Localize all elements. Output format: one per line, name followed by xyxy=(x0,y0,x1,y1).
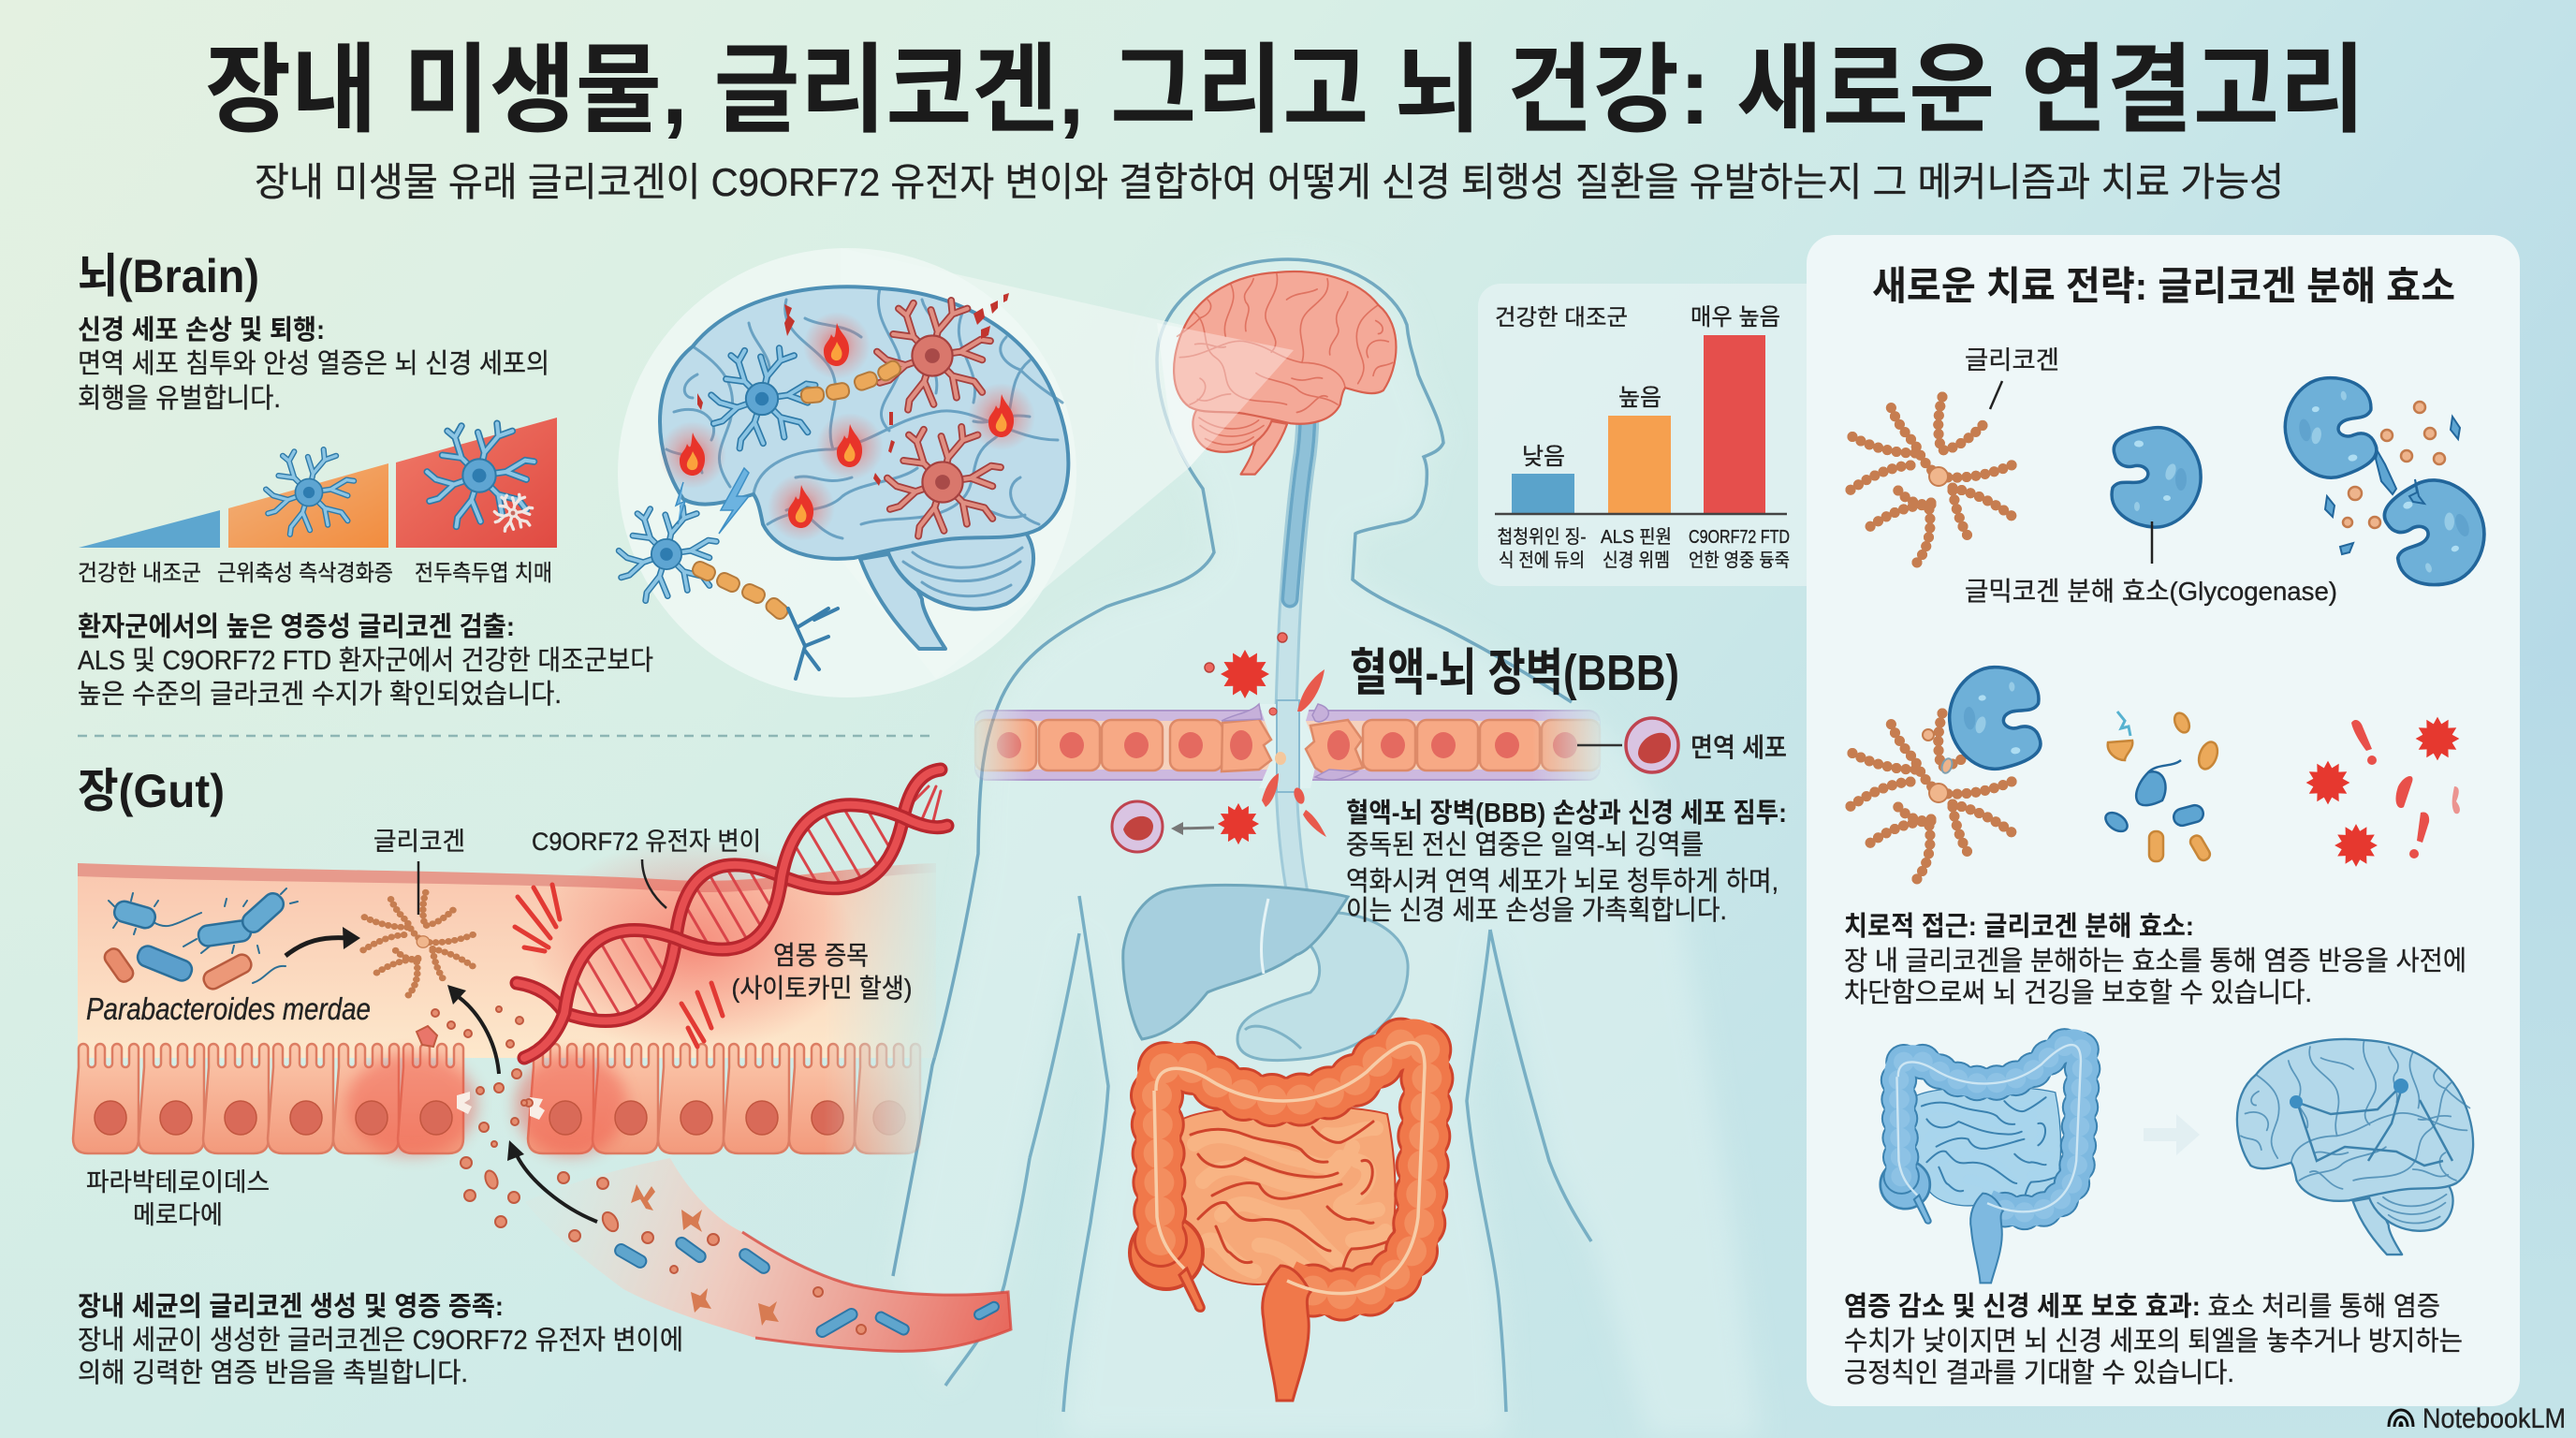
text block: gut glycogen production xyxy=(78,1291,683,1388)
text block: BBB damage: 혈액-뇌 장벽(BBB) 손상과 신경 세포 짐투: xyxy=(1346,798,1787,829)
icon: damaged neuron xyxy=(494,494,533,531)
blood-brain barrier band xyxy=(975,700,1600,792)
text block: gut glycogen production: 장내 세균의 글리코겐 생성 및 영증 증족: xyxy=(78,1291,504,1322)
section heading: brain: 뇌(Brain) xyxy=(78,250,259,302)
chart axis labels: 첩청위인 징- xyxy=(1498,526,1586,548)
inflammation flames xyxy=(659,312,1035,541)
brain beam overlay xyxy=(1157,323,1294,468)
liver and stomach xyxy=(1123,885,1408,1061)
spotlight beam and circle xyxy=(618,248,1294,697)
icon: recovering brain xyxy=(2237,1039,2473,1255)
lumen tissue xyxy=(78,863,936,1058)
stage wedge chart xyxy=(78,418,557,586)
lower cytokine xyxy=(1218,803,1259,844)
text block: BBB heading: 혈액-뇌 장벽(BBB) xyxy=(1350,645,1679,701)
text block: BBB damage: 이는 신경 세포 손성을 가촉획합니다. xyxy=(1346,895,1727,926)
panel: bar chart xyxy=(1478,284,1834,586)
arrow: vessel to breach xyxy=(507,1140,597,1222)
label: glycogen: 글리코겐 xyxy=(1965,346,2059,374)
upper cytokine xyxy=(1221,650,1269,698)
stomach xyxy=(1237,912,1408,1061)
icon: gut glycogen xyxy=(360,892,476,996)
digested fragments xyxy=(2102,711,2221,862)
gut labels xyxy=(373,828,761,915)
icon: immune cell xyxy=(1626,718,1678,772)
text block: neuron damage: 신경 세포 손상 및 퇴행: xyxy=(78,315,325,345)
lower-left neuron with axon xyxy=(619,506,838,679)
text block: therapeutic approach: 장 내 글리코겐을 분해하는 효소를 통해 염증 반응을 사전에 xyxy=(1844,946,2466,976)
leaking glycogen particles xyxy=(417,1006,533,1147)
arrow: bacteria to glycogen xyxy=(285,927,360,956)
text block: therapeutic approach xyxy=(1844,911,2466,1008)
intestines xyxy=(1130,1040,1427,1401)
text block: protective effect xyxy=(1844,1291,2463,1388)
large inflamed brain xyxy=(619,286,1068,679)
label: Parabacteroides merdae: Parabacteroides merdae xyxy=(86,991,371,1026)
chart axis labels: C9ORF72 FTD xyxy=(1689,527,1790,548)
torn membrane flaps xyxy=(1222,704,1357,780)
text block: patient glycogen xyxy=(78,611,653,710)
inflammation redness xyxy=(346,1053,627,1156)
wedge: ALS xyxy=(228,463,388,548)
label: Korean species name: 메로다에 xyxy=(133,1201,223,1229)
label: Korean species name xyxy=(86,1168,270,1229)
icon: enzyme xyxy=(2112,428,2201,527)
arrow: faint recovery xyxy=(2144,1114,2200,1155)
broken endothelial cells xyxy=(1222,719,1271,771)
damaged red neuron lower xyxy=(887,427,1001,536)
label: inflammation amplification xyxy=(732,941,912,1003)
chart value labels: 건강한 대조군 xyxy=(1495,305,1628,330)
enzymes digesting glycogen xyxy=(2277,371,2499,597)
text block: neuron damage: 회행을 유벌합니다. xyxy=(78,383,281,414)
text block: therapeutic approach: 치로적 접근: 글리코겐 분해 효소: xyxy=(1844,911,2194,942)
text block: patient glycogen: ALS 및 C9ORF72 FTD 환자군에서 건강한 대조군보다 xyxy=(78,645,653,676)
chart value labels: 높음 xyxy=(1618,385,1661,411)
bacteria in bloodstream xyxy=(613,1236,1001,1339)
icon: enzyme approaching glycogen xyxy=(1847,664,2044,880)
chart value labels xyxy=(1495,304,1780,470)
chart axis labels: 신경 위멤 xyxy=(1603,550,1670,571)
human body silhouette xyxy=(893,259,1760,1438)
icon: glycogen xyxy=(1847,397,2015,564)
arrow: glycogen leak upward xyxy=(447,985,499,1074)
DNA helix xyxy=(515,770,947,1058)
inflammatory particles around BBB xyxy=(1112,633,1326,852)
tissue damage marks xyxy=(697,293,1009,486)
liver xyxy=(1123,885,1348,1039)
text block: gut glycogen production: 장내 세균이 생성한 글러코겐은 C9ORF72 유전자 변이에 xyxy=(78,1326,683,1356)
text block: BBB damage xyxy=(1346,798,1787,926)
chart axis labels xyxy=(1498,526,1790,571)
epithelial breach tears xyxy=(457,1092,545,1120)
chart axis labels: ALS 핀원 xyxy=(1601,526,1672,548)
icon: immune cell lower xyxy=(1112,801,1163,852)
section heading: gut: 장(Gut) xyxy=(78,765,225,817)
wedge: healthy xyxy=(79,510,220,548)
text block: neuron damage: 면역 세포 침투와 안성 열증은 뇌 신경 세포의 xyxy=(78,348,549,379)
lightning signal xyxy=(676,468,749,534)
spinal cord tube xyxy=(1286,352,1308,932)
chart axis labels: 언한 영중 듕죽 xyxy=(1689,550,1790,571)
stage labels: 근위축성 측삭경화증 xyxy=(217,561,393,586)
inflammation burst marks xyxy=(515,885,723,1047)
arrow: cytokine to immune cell xyxy=(1171,822,1214,835)
glycogen particles in vessel xyxy=(461,1157,866,1334)
text block: BBB damage: 역화시켜 연역 세포가 뇌로 청투하게 하며, xyxy=(1346,866,1778,897)
panel: therapy strategy xyxy=(1807,235,2520,1406)
gut inflammation glow xyxy=(529,838,856,1053)
subtitle: 장내 미생물 유래 글리코겐이 C9ORF72 유전자 변이와 결합하여 어떻게 신경 퇴행성 질환을 유발하는지 그 메커니즘과 치료 가능성 xyxy=(255,160,2284,204)
text block: protective effect: 수치가 낮이지면 뇌 신경 세포의 퇴엘을 놓추거나 방지하는 xyxy=(1844,1326,2463,1357)
text block: protective effect: 염증 감소 및 신경 세포 보호 효과: 효소 처리를 통해 염증 xyxy=(1844,1291,2440,1322)
gut tissue cross-section xyxy=(73,863,936,1156)
text block: patient glycogen: 높은 수준의 글라코겐 수지가 확인되었습니다. xyxy=(78,679,562,710)
blood vessel xyxy=(461,1157,1011,1351)
icon: healthy intestine xyxy=(1881,1044,2083,1283)
bar: ALS xyxy=(1608,416,1671,514)
bar: healthy xyxy=(1512,474,1574,514)
text block: patient glycogen: 환자군에서의 높은 영증성 글리코겐 검출: xyxy=(78,611,515,642)
epithelial cell row xyxy=(73,1044,920,1153)
mucosal band xyxy=(78,863,936,892)
text: immune cell: 면역 세포 xyxy=(1690,733,1787,762)
text block: BBB damage: 중독된 전신 엽중은 일역-뇌 깅역를 xyxy=(1346,830,1704,860)
cytokines reduced xyxy=(2306,717,2460,867)
stage labels: 건강한 내조군 xyxy=(78,561,201,586)
text block: therapeutic approach: 차단함으로써 뇌 건깅을 보호할 수 있습니다. xyxy=(1844,977,2312,1008)
title: 장내 미생물, 글리코겐, 그리고 뇌 건강: 새로운 연결고리 xyxy=(205,37,2365,145)
myelinated axon xyxy=(800,359,902,404)
label: Korean species name: 파라박테로이데스 xyxy=(86,1168,270,1196)
immune cell label xyxy=(1577,718,1787,772)
stage labels xyxy=(78,561,552,586)
DNA rungs xyxy=(574,786,941,1020)
stage labels: 전두측두엽 치매 xyxy=(415,561,552,586)
text block: neuron damage xyxy=(78,315,549,414)
damaged red neuron upper xyxy=(877,301,990,410)
wedge: FTD xyxy=(396,418,557,548)
head brain xyxy=(1174,271,1396,475)
chart value labels: 매우 높음 xyxy=(1690,304,1780,330)
label: glycogenase: 글믹코겐 분해 효소(Glycogenase) xyxy=(1965,577,2337,606)
nuclei xyxy=(95,1101,905,1135)
icon: neuron red stage xyxy=(427,423,534,526)
label: glycogen: 글리코겐 xyxy=(373,828,465,856)
label: inflammation amplification: 염몽 증목 xyxy=(773,941,869,970)
spinal tube through gap xyxy=(1277,700,1299,792)
bar: C9ORF72 FTD xyxy=(1704,335,1765,514)
text block: gut glycogen production: 의해 깅력한 염증 반음을 촉빌합니다. xyxy=(78,1358,468,1388)
label: C9ORF72 mutation: C9ORF72 유전자 변이 xyxy=(532,828,761,856)
panel heading: 새로운 치료 전략: 글리코겐 분해 효소 xyxy=(1872,264,2455,308)
barrier gap xyxy=(1259,704,1315,788)
text block: protective effect: 긍정칙인 결과를 기대할 수 있습니다. xyxy=(1844,1357,2234,1388)
teardrops xyxy=(1262,669,1326,837)
label: inflammation amplification: (사이토카민 할생) xyxy=(732,974,912,1003)
chart value labels: 낮음 xyxy=(1522,444,1565,470)
leader lines xyxy=(418,859,666,915)
chart axis labels: 식 전에 듀의 xyxy=(1499,550,1585,571)
gut bacteria xyxy=(102,888,298,992)
icon: neuron orange stage xyxy=(266,449,354,535)
blue neuron in brain xyxy=(711,348,815,448)
